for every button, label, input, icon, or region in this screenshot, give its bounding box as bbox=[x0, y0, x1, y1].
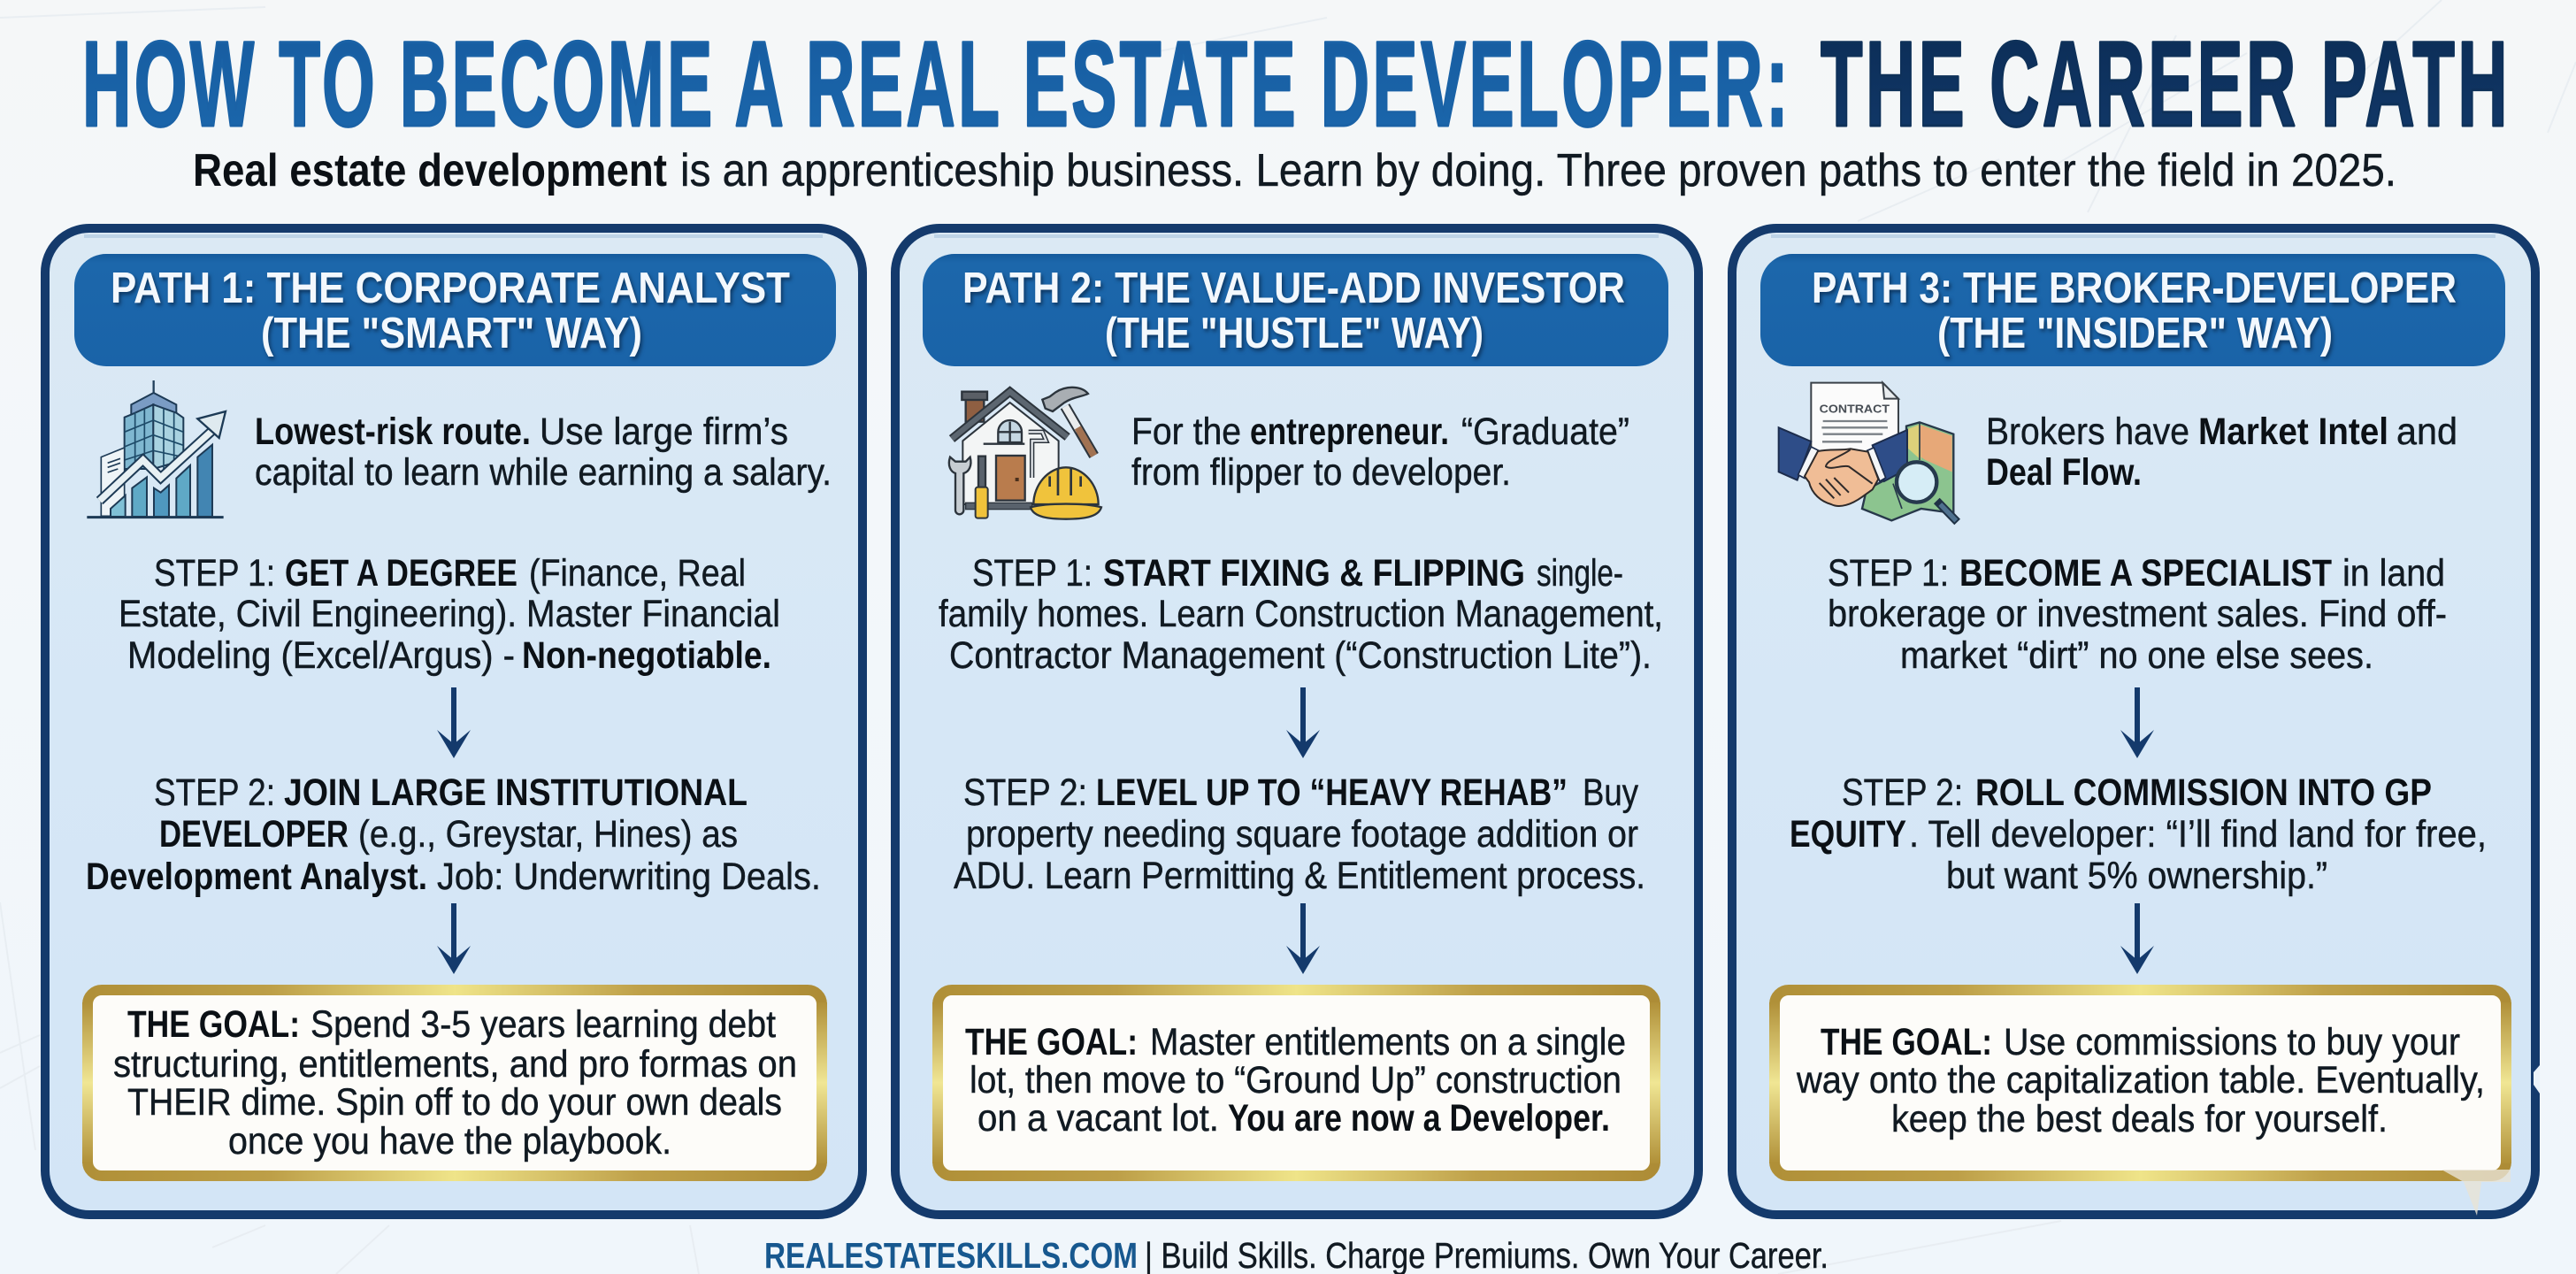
callout: goal: way onto the capitalization table. Eventually, bbox=[1796, 1059, 2485, 1101]
callout: goal: THEIR dime. Spin off to do your own deals bbox=[127, 1081, 782, 1124]
panel: path 1 corporate analyst bbox=[45, 228, 862, 1215]
step 2 text bbox=[1790, 771, 2487, 897]
callout: goal: lot, then move to “Ground Up” construction bbox=[970, 1059, 1622, 1101]
step 1 text: BECOME A SPECIALIST bbox=[1959, 552, 2332, 595]
intro text bbox=[1986, 411, 2457, 494]
intro text: capital to learn while earning a salary. bbox=[255, 451, 832, 494]
panel 1 heading: PATH 1: THE CORPORATE ANALYST bbox=[111, 265, 790, 312]
panel: path 2 value-add investor bbox=[895, 228, 1698, 1215]
step 2 text: STEP 2: bbox=[154, 771, 275, 814]
panel 3 heading: PATH 3: THE BROKER-DEVELOPER bbox=[1812, 265, 2457, 312]
callout: goal: THE GOAL: bbox=[965, 1021, 1138, 1063]
step 2 text: EQUITY bbox=[1790, 813, 1906, 856]
arrow bbox=[1286, 687, 1320, 758]
step 1 text: STEP 1: bbox=[972, 552, 1092, 595]
callout: goal: THE GOAL: bbox=[1821, 1021, 1992, 1063]
arrow bbox=[1286, 903, 1320, 974]
intro text bbox=[255, 411, 832, 494]
callout: goal: Spend 3-5 years learning debt bbox=[310, 1003, 776, 1046]
callout: goal: keep the best deals for yourself. bbox=[1891, 1098, 2388, 1140]
step 2 text: property needing square footage addition or bbox=[966, 813, 1638, 856]
icon: contract, handshake, map and magnifier: CONTRACT bbox=[1820, 402, 1890, 415]
step 1 text: START FIXING & FLIPPING bbox=[1103, 552, 1525, 595]
step 2 text: ROLL COMMISSION INTO GP bbox=[1975, 771, 2432, 814]
intro text: entrepreneur. bbox=[1250, 411, 1449, 453]
arrow bbox=[437, 687, 471, 758]
callout: goal bbox=[1769, 990, 2511, 1176]
icon: contract, handshake, map and magnifier bbox=[1779, 383, 1958, 522]
step 1 text: brokerage or investment sales. Find off- bbox=[1828, 593, 2447, 635]
arrow bbox=[2120, 903, 2154, 974]
intro text: Use large firm’s bbox=[540, 411, 788, 453]
panel 2 card bbox=[895, 228, 1698, 1215]
callout: goal bbox=[82, 990, 827, 1176]
callout: goal: THE GOAL: bbox=[127, 1003, 300, 1046]
callout: goal: once you have the playbook. bbox=[228, 1120, 671, 1163]
step 1 text: family homes. Learn Construction Management, bbox=[939, 593, 1663, 635]
step 1 text: Modeling (Excel/Argus) - bbox=[127, 634, 515, 677]
intro text: Market Intel bbox=[2198, 411, 2388, 453]
panel 1 card bbox=[45, 228, 862, 1215]
step 1 text: single- bbox=[1537, 552, 1623, 595]
step 1 text: STEP 1: bbox=[154, 552, 275, 595]
step 1 text: market “dirt” no one else sees. bbox=[1900, 634, 2373, 677]
step 2 text: LEVEL UP TO “HEAVY REHAB” bbox=[1096, 771, 1568, 814]
step 2 text: STEP 2: bbox=[963, 771, 1087, 814]
intro text: from flipper to developer. bbox=[1131, 451, 1511, 494]
step 2 text: DEVELOPER bbox=[159, 813, 349, 856]
callout: goal: structuring, entitlements, and pro formas on bbox=[113, 1043, 797, 1086]
panel 3 heading bbox=[1760, 254, 2505, 366]
step 1 text bbox=[119, 552, 780, 677]
panel 2 heading: (THE "HUSTLE" WAY) bbox=[1105, 310, 1484, 357]
step 1 text bbox=[939, 552, 1663, 677]
callout: goal: Use commissions to buy your bbox=[2004, 1021, 2460, 1063]
intro text: Brokers have bbox=[1986, 411, 2189, 453]
intro text: Lowest-risk route. bbox=[255, 411, 531, 453]
panel 3 card bbox=[1732, 228, 2535, 1215]
step 2 text: but want 5% ownership.” bbox=[1946, 855, 2327, 897]
step 1 text: in land bbox=[2342, 552, 2445, 595]
footer bbox=[764, 1235, 1828, 1274]
step 1 text: Contractor Management (“Construction Lite”). bbox=[949, 634, 1652, 677]
subtitle: is an apprenticeship business. Learn by doing. Three proven paths to enter the field in 2025. bbox=[680, 145, 2396, 196]
arrow bbox=[2120, 687, 2154, 758]
panel 3 heading: (THE "INSIDER" WAY) bbox=[1937, 310, 2333, 357]
step 2 text bbox=[86, 771, 821, 898]
step 2 text: Development Analyst. bbox=[86, 856, 427, 898]
step 1 text: (Finance, Real bbox=[529, 552, 746, 595]
callout: goal bbox=[932, 990, 1660, 1176]
callout: goal: on a vacant lot. bbox=[978, 1097, 1219, 1140]
step 1 text: Non-negotiable. bbox=[522, 634, 771, 677]
icon: house with tools and hard hat bbox=[949, 388, 1101, 519]
panel 1 heading bbox=[74, 254, 836, 366]
step 1 text bbox=[1828, 552, 2447, 677]
step 2 text: ADU. Learn Permitting & Entitlement process. bbox=[954, 855, 1645, 897]
panel 2 heading bbox=[923, 254, 1668, 366]
subtitle: Real estate development bbox=[193, 145, 667, 196]
intro text: “Graduate” bbox=[1461, 411, 1629, 453]
callout: goal: You are now a Developer. bbox=[1228, 1097, 1610, 1140]
step 2 text: . Tell developer: “I’ll find land for free, bbox=[1909, 813, 2487, 856]
arrow bbox=[437, 903, 471, 974]
intro text: and bbox=[2396, 411, 2457, 453]
panel: path 3 broker-developer bbox=[1732, 228, 2540, 1216]
intro text: Deal Flow. bbox=[1986, 451, 2142, 494]
step 2 text: Buy bbox=[1583, 771, 1638, 814]
intro text bbox=[1131, 411, 1629, 494]
step 1 text: Estate, Civil Engineering). Master Financial bbox=[119, 593, 780, 635]
intro text: For the bbox=[1131, 411, 1241, 453]
step 2 text: STEP 2: bbox=[1842, 771, 1963, 814]
icon: office tower with rising chart arrow bbox=[87, 380, 226, 518]
panel 2 heading: PATH 2: THE VALUE-ADD INVESTOR bbox=[962, 265, 1625, 312]
step 2 text bbox=[954, 771, 1645, 897]
step 2 text: Job: Underwriting Deals. bbox=[437, 856, 821, 898]
step 2 text: JOIN LARGE INSTITUTIONAL bbox=[284, 771, 748, 814]
step 1 text: STEP 1: bbox=[1828, 552, 1949, 595]
step 2 text: (e.g., Greystar, Hines) as bbox=[358, 813, 738, 856]
callout: goal: Master entitlements on a single bbox=[1150, 1021, 1626, 1063]
panel 1 heading: (THE "SMART" WAY) bbox=[261, 310, 642, 357]
step 1 text: GET A DEGREE bbox=[285, 552, 518, 595]
